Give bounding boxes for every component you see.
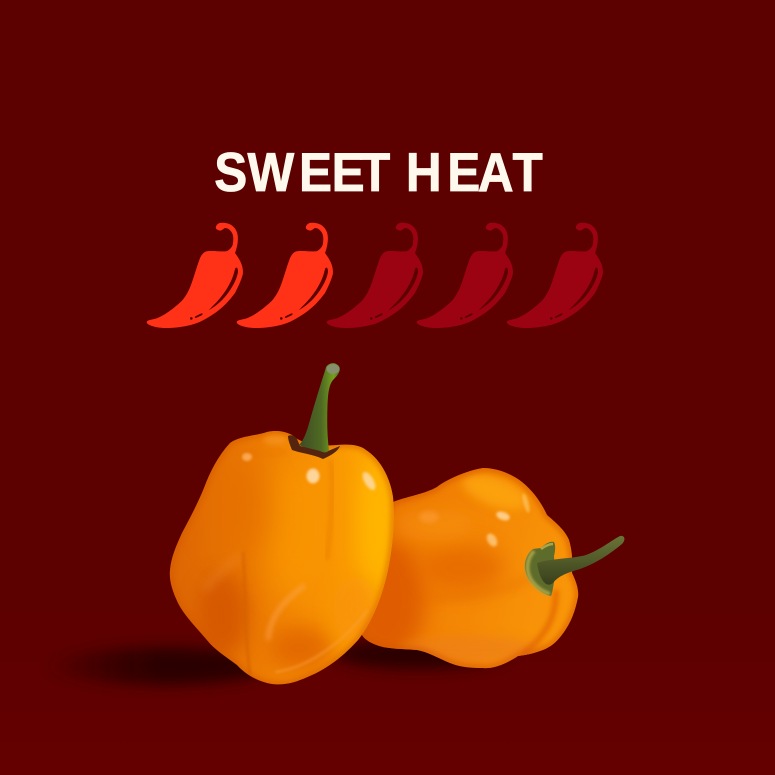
right habanero pepper	[362, 468, 624, 668]
chili 4 (inactive)	[417, 223, 513, 328]
chili 3 (inactive)	[327, 223, 423, 328]
heat rating: 2 of 5 chilies	[147, 223, 603, 328]
chili 1 (active)	[147, 223, 243, 328]
ground shadow	[48, 639, 505, 685]
left habanero pepper	[165, 363, 400, 690]
infographic canvas	[66, 152, 624, 690]
stem tip	[326, 364, 340, 374]
right pepper calyx	[525, 542, 555, 596]
left pepper calyx	[288, 435, 340, 459]
right pepper stem	[537, 536, 624, 585]
title: SWEET HEAT	[214, 143, 543, 204]
chili 5 (inactive)	[507, 223, 603, 328]
left pepper stem	[299, 363, 340, 452]
chili 2 (active)	[237, 223, 333, 328]
